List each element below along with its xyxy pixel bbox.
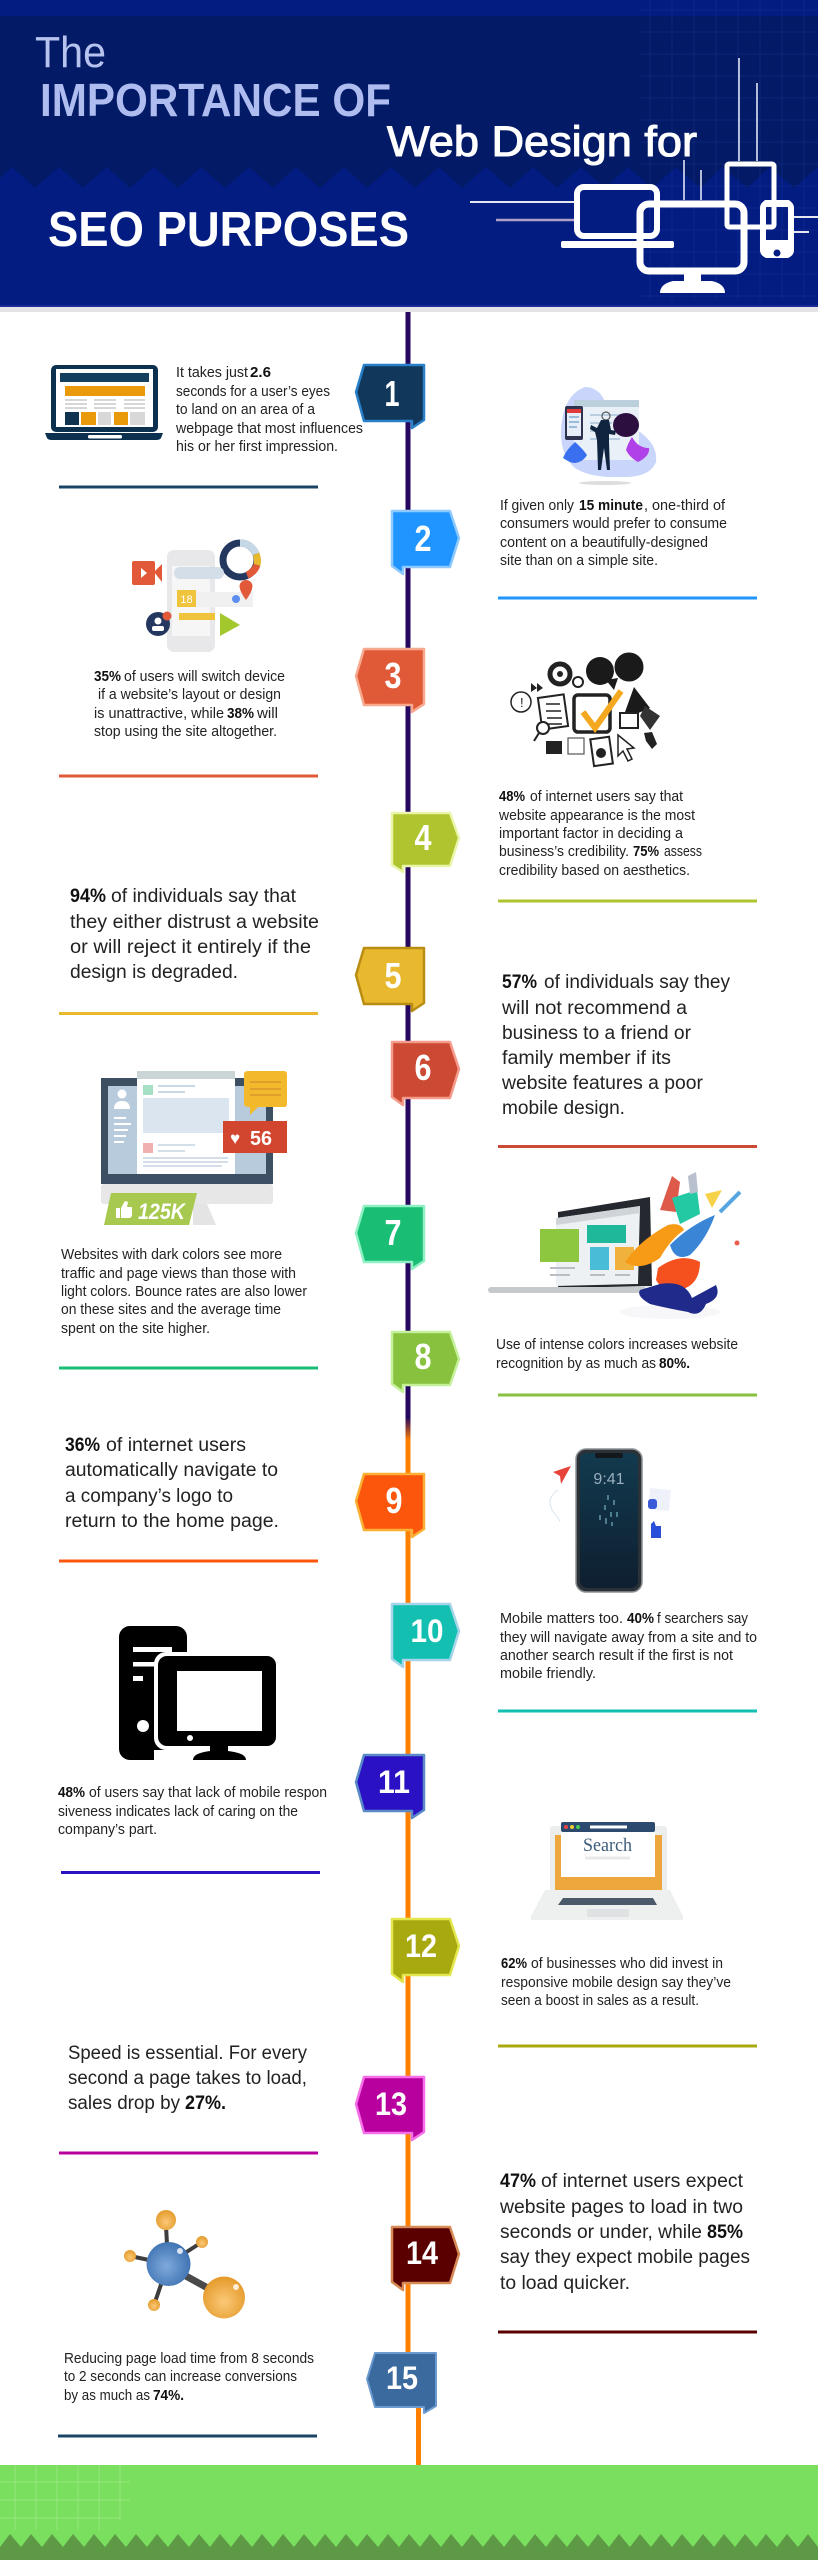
panel: stat 1 [45, 365, 424, 488]
icon: laptop with search: Search [583, 1835, 632, 1856]
text: stat 10: 40% [627, 1611, 654, 1627]
badge 6 [392, 1042, 459, 1105]
text: stat 9: automatically navigate to [65, 1460, 278, 1481]
text: stat 4: 75% [633, 844, 659, 860]
panel: stat 15 [58, 2210, 436, 2438]
badge 6: 6 [414, 1047, 432, 1088]
text: stat 4: business’s credibility. [499, 844, 629, 860]
badge 11 [356, 1755, 424, 1818]
text: stat 13 [68, 2043, 307, 2114]
rule: stat 3 [59, 774, 318, 778]
panel: stat 12 [392, 1822, 757, 2048]
text: stat 6: will not recommend a [501, 998, 687, 1019]
title: Web Design for: Web Design for [387, 118, 697, 166]
rule: stat 11 [61, 1871, 320, 1874]
footer band [0, 2465, 818, 2560]
panel: stat 9 [59, 1435, 424, 1562]
text: stat 1: It takes just [176, 365, 248, 381]
text: stat 2: 15 minute [579, 498, 643, 514]
badge 4: 4 [414, 817, 432, 858]
text: stat 15 [64, 2351, 314, 2404]
text: stat 9 [65, 1435, 279, 1532]
icon: laptop with search [531, 1822, 683, 1920]
panel: stat 10 [392, 1449, 757, 1712]
panel: stat 14 [392, 2171, 757, 2334]
text: stat 2: site than on a simple site. [500, 553, 658, 569]
rule: stat 13 [59, 2152, 318, 2154]
text: stat 12 [501, 1956, 731, 2009]
badge 1: 1 [384, 373, 400, 414]
badge 1 [356, 365, 424, 428]
badge 8 [392, 1332, 459, 1392]
badge 14: 14 [406, 2235, 438, 2271]
text: stat 13: sales drop by [68, 2093, 180, 2114]
text: stat 4: of internet users say that [530, 789, 683, 805]
text: stat 2: consumers would prefer to consume [500, 516, 727, 532]
text: stat 7: spent on the site higher. [61, 1321, 210, 1337]
text: stat 6: website features a poor [501, 1073, 704, 1094]
text: stat 14: seconds or under, while [500, 2222, 702, 2243]
icon: black business pictograms [511, 652, 660, 766]
text: stat 1: 2.6 [250, 365, 271, 381]
text: stat 11: siveness indicates lack of caring on the [58, 1804, 298, 1820]
text: stat 3: stop using the site altogether. [94, 724, 277, 740]
text: stat 9: of internet users [106, 1435, 246, 1456]
title: Importance of: IMPORTANCE OF [40, 74, 391, 126]
header banner [0, 0, 818, 312]
icon: desktop with social stats: 125K [138, 1199, 187, 1224]
rule: stat 7 [59, 1366, 318, 1370]
badge 13 [356, 2077, 424, 2140]
icon: devices [470, 58, 818, 293]
text: stat 8 [496, 1337, 738, 1372]
text: stat 9: a company’s logo to [65, 1486, 233, 1507]
icon: smartphone [550, 1449, 671, 1592]
text: stat 14: website pages to load in two [499, 2197, 743, 2218]
rule: stat 5 [59, 1012, 318, 1015]
text: stat 1: webpage that most influences [175, 421, 363, 437]
badge 4 [392, 813, 459, 872]
text: stat 14: to load quicker. [500, 2273, 630, 2294]
text: stat 1: his or her first impression. [176, 439, 338, 455]
text: stat 5: of individuals say that [111, 886, 297, 907]
badge 3: 3 [384, 655, 402, 696]
rule: stat 2 [498, 596, 757, 600]
text: stat 7: light colors. Bounce rates are also lower [61, 1284, 307, 1300]
icon: mobile apps: 18 [180, 594, 193, 606]
badge 10: 10 [410, 1613, 444, 1649]
text: stat 12: responsive mobile design say they’ve [501, 1975, 731, 1991]
text: stat 1: to land on an area of a [176, 402, 316, 418]
text: stat 4: credibility based on aesthetics. [499, 863, 690, 879]
panel: stat 4 [392, 652, 757, 902]
panel: stat 8 [392, 1172, 757, 1396]
text: stat 2: content on a beautifully-designed [500, 535, 708, 551]
text: stat 11: company’s part. [58, 1822, 157, 1838]
text: stat 6 [501, 972, 730, 1119]
badge 7: 7 [384, 1212, 402, 1253]
text: stat 14: 85% [707, 2222, 743, 2243]
badge 15: 15 [386, 2360, 418, 2396]
badge 2: 2 [414, 518, 432, 559]
text: stat 10 [500, 1611, 757, 1682]
icon: colourful laptop [488, 1172, 740, 1319]
text: stat 6: of individuals say they [544, 972, 730, 993]
badge 9 [356, 1474, 424, 1537]
text: stat 6: business to a friend or [502, 1023, 692, 1044]
text: stat 7: traffic and page views than those with [61, 1266, 296, 1282]
text: stat 10: they will navigate away from a site and to [500, 1630, 757, 1646]
rule: stat 12 [498, 2044, 757, 2048]
text: stat 9: 36% [65, 1435, 100, 1456]
timeline line [406, 312, 410, 2352]
text: stat 1: seconds for a user’s eyes [176, 384, 330, 400]
text: stat 5: or will reject it entirely if the [70, 937, 311, 958]
badge 13: 13 [375, 2086, 407, 2122]
panel: stat 5 [59, 886, 424, 1015]
text: stat 13: 27%. [185, 2093, 226, 2114]
text: stat 10: another search result if the first is not [500, 1648, 733, 1664]
text: stat 4: website appearance is the most [498, 808, 695, 824]
rule: stat 9 [59, 1560, 318, 1562]
text: stat 15: Reducing page load time from 8 seconds [64, 2351, 314, 2367]
text: stat 6: mobile design. [502, 1098, 625, 1119]
text: stat 10: mobile friendly. [500, 1666, 596, 1682]
badge 2 [392, 511, 459, 574]
panel: stat 7 [59, 1071, 424, 1370]
text: stat 14: 47% [500, 2171, 536, 2192]
badge 3 [356, 649, 424, 712]
panel: stat 2 [392, 387, 757, 600]
badge 12: 12 [405, 1928, 437, 1964]
text: stat 4: important factor in deciding a [499, 826, 684, 842]
icon: smartphone: 9:41 [593, 1471, 625, 1488]
icon: mobile apps [132, 543, 257, 652]
icon: desktop with social stats: ♥ [230, 1129, 240, 1148]
text: stat 2 [500, 498, 727, 569]
text: stat 3: will [256, 706, 278, 722]
text: stat 15: to 2 seconds can increase conversions [64, 2369, 297, 2385]
text: stat 7 [61, 1247, 307, 1337]
text: stat 11: 48% [58, 1785, 85, 1801]
text: stat 2: If given only [500, 498, 575, 514]
text: stat 3: of users will switch device [124, 669, 285, 685]
text: stat 15: by as much as [64, 2388, 150, 2404]
icon: desktop with social stats [101, 1071, 287, 1225]
text: stat 5: they either distrust a website [70, 912, 319, 933]
badge 7 [356, 1206, 424, 1269]
text: stat 5: 94% [70, 886, 106, 907]
text: stat 6: family member if its [502, 1048, 671, 1069]
rule: stat 6 [498, 1145, 757, 1148]
text: stat 3: 35% [94, 669, 121, 685]
text: stat 3: 38% [227, 706, 254, 722]
badge 5 [356, 948, 424, 1011]
text: stat 13: Speed is essential. For every [68, 2043, 307, 2064]
title: SEO Purposes: SEO PURPOSES [48, 203, 409, 257]
rule: stat 14 [498, 2330, 757, 2334]
badge 10 [392, 1604, 459, 1667]
text: stat 7: Websites with dark colors see more [61, 1247, 282, 1263]
icon: person at dashboard [561, 387, 656, 485]
text: stat 3 [94, 669, 285, 740]
rule: stat 8 [498, 1394, 757, 1396]
text: stat 13: second a page takes to load, [68, 2068, 307, 2089]
panel: stat 6 [392, 972, 757, 1148]
text: stat 15: 74%. [153, 2388, 184, 2404]
icon: laptop [45, 365, 163, 440]
text: stat 12: seen a boost in sales as a result. [501, 1993, 699, 2009]
icon: desktop with social stats: 56 [250, 1128, 272, 1150]
rule: stat 4 [498, 900, 757, 902]
badge 9: 9 [386, 1480, 402, 1521]
badge 14 [392, 2227, 459, 2290]
icon: molecule [124, 2210, 245, 2318]
text: stat 4 [498, 789, 702, 879]
text: stat 9: return to the home page. [65, 1511, 279, 1532]
text: stat 10: f searchers say [657, 1611, 749, 1627]
text: stat 5: design is degraded. [70, 962, 238, 983]
text: stat 12: of businesses who did invest in [531, 1956, 723, 1972]
icon: black business pictograms: ! [520, 695, 524, 710]
text: stat 7: on these sites and the average time [61, 1302, 281, 1318]
text: stat 6: 57% [502, 972, 537, 993]
rule: stat 15 [58, 2434, 317, 2438]
text: stat 8: recognition by as much as [496, 1356, 656, 1372]
text: stat 12: 62% [501, 1956, 527, 1972]
text: stat 10: Mobile matters too. [500, 1611, 623, 1627]
title: The: The [35, 28, 106, 77]
panel: stat 3 [59, 543, 424, 778]
icon: desktop computer [119, 1626, 280, 1762]
rule: stat 10 [498, 1710, 757, 1712]
text: stat 4: assess [664, 844, 702, 860]
panel: stat 13 [59, 2043, 424, 2154]
text: stat 1 [175, 365, 363, 455]
text: stat 11 [58, 1785, 327, 1838]
text: stat 2: , one-third of [644, 498, 726, 514]
text: stat 11: of users say that lack of mobile respon [89, 1785, 327, 1801]
timeline end segment [416, 2400, 421, 2465]
text: stat 14 [499, 2171, 750, 2294]
rule: stat 1 [59, 486, 318, 488]
badge 12 [392, 1919, 459, 1982]
badge 15 [367, 2353, 436, 2413]
text: stat 8: 80%. [659, 1356, 690, 1372]
text: stat 3: if a website’s layout or design [98, 687, 281, 703]
text: stat 4: 48% [499, 789, 525, 805]
text: stat 14: of internet users expect [541, 2171, 744, 2192]
badge 5: 5 [384, 955, 402, 996]
text: stat 8: Use of intense colors increases website [496, 1337, 738, 1353]
badge 8: 8 [414, 1336, 432, 1377]
badge 11: 11 [378, 1764, 410, 1800]
text: stat 14: say they expect mobile pages [500, 2247, 750, 2268]
panel: stat 11 [58, 1626, 424, 1874]
text: stat 5 [70, 886, 319, 983]
text: stat 3: is unattractive, while [94, 706, 224, 722]
